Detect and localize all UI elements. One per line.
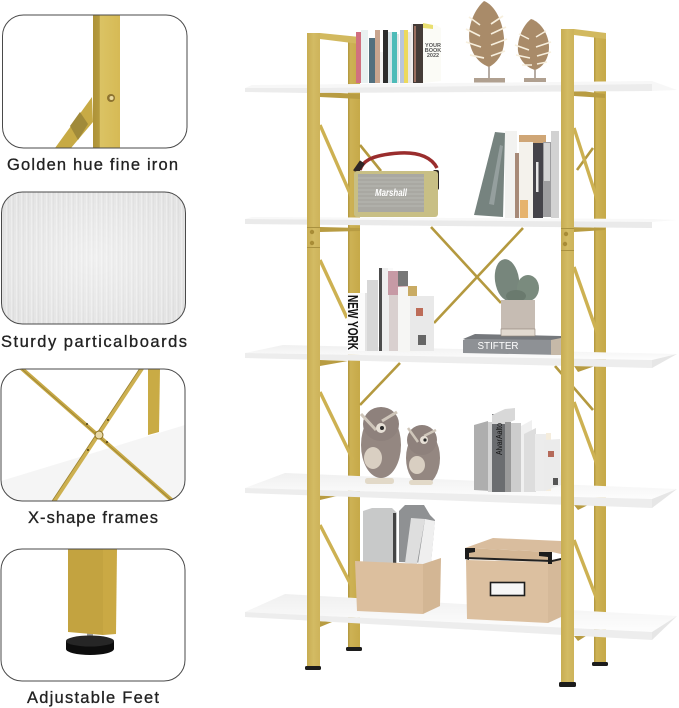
panel: golden hue fine iron — [2, 15, 187, 174]
front left upright — [305, 33, 321, 670]
logo: Marshall — [375, 187, 408, 199]
side braces — [320, 125, 598, 602]
caption: Adjustable Feet — [27, 689, 160, 707]
panel: adjustable feet — [1, 549, 185, 707]
back cross braces — [360, 145, 593, 410]
back uprights and feet — [320, 29, 608, 666]
grille — [358, 174, 424, 212]
books on fourth shelf — [474, 408, 561, 492]
shelf 5 — [245, 594, 677, 640]
book cover text: YOUR — [425, 43, 441, 49]
metal corners — [465, 548, 475, 560]
books on top shelf — [356, 23, 441, 83]
shelf 3 — [245, 345, 677, 368]
rolled papers — [363, 505, 435, 564]
bookshelf — [245, 1, 677, 687]
lidded storage box — [465, 538, 561, 623]
marshall speaker — [353, 153, 439, 217]
books on fourth shelf: AlvarAalto — [495, 423, 504, 455]
owl figurines — [361, 407, 440, 485]
body — [354, 171, 438, 217]
close-up: leg and foot — [66, 549, 117, 655]
leaf ornament large — [466, 1, 507, 82]
books on third shelf — [344, 268, 434, 352]
panel: x-shape frames — [1, 366, 185, 527]
small owl — [406, 425, 440, 485]
label holder — [490, 582, 524, 596]
close-up: crossing braces — [1, 366, 185, 505]
cactus — [492, 258, 522, 302]
close-up: gold post with brace — [55, 15, 120, 148]
caption: X-shape frames — [28, 509, 159, 527]
shelf brackets — [320, 90, 605, 641]
books on third shelf: NEW YORK — [344, 295, 361, 350]
books on second shelf — [474, 131, 559, 218]
books on top shelf: 2022 — [427, 53, 439, 59]
frame — [1, 549, 185, 681]
frame — [1, 369, 185, 501]
books on top shelf: BOOK — [425, 48, 441, 54]
box faces — [355, 561, 423, 614]
front right upright — [559, 29, 576, 687]
wood grain swatch — [2, 192, 186, 324]
shelf 2 — [245, 217, 677, 228]
caption: Golden hue fine iron — [7, 156, 179, 174]
handle — [360, 153, 437, 170]
large owl — [361, 407, 401, 484]
storage box with papers — [355, 505, 441, 614]
swatch highlight — [2, 193, 185, 323]
shelf 1 — [245, 81, 677, 93]
panel: sturdy particalboards — [1, 192, 188, 351]
stifter book: STIFTER — [478, 341, 518, 352]
new york book — [347, 293, 365, 351]
cactus in pot on book — [463, 258, 561, 355]
frame — [2, 15, 187, 148]
pot — [501, 300, 535, 329]
leaf ornament small — [515, 19, 551, 82]
caption: Sturdy particalboards — [1, 333, 188, 351]
shelf 4 — [245, 473, 677, 508]
